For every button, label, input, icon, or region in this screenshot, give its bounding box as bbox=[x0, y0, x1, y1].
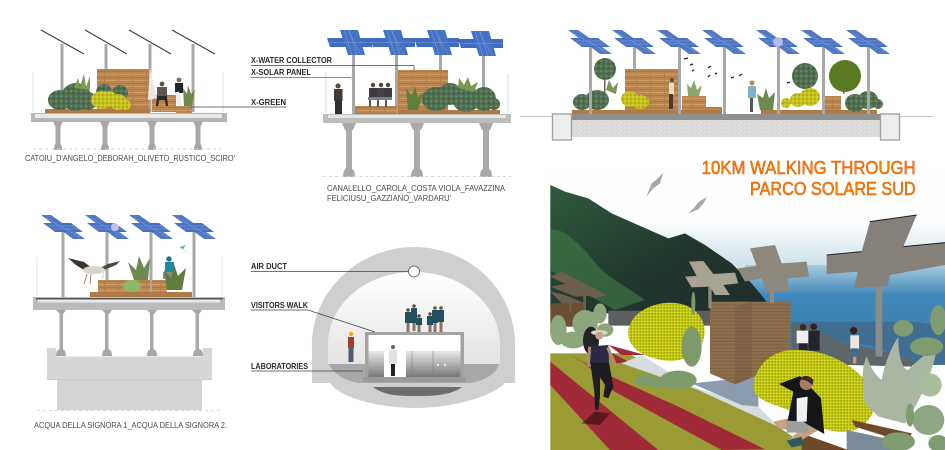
mountain bbox=[550, 185, 767, 317]
abutment bbox=[47, 348, 212, 410]
planter foreground bbox=[802, 420, 912, 450]
laboratory box bbox=[363, 332, 466, 382]
two people on steps bbox=[157, 78, 183, 106]
wooden wall box bbox=[710, 302, 791, 384]
lab technician bbox=[389, 345, 397, 376]
distant solar panels bbox=[550, 272, 607, 312]
callouts: VISITORS WALK bbox=[251, 301, 308, 310]
posts and panels bbox=[568, 30, 890, 114]
caption: ACQUA DELLA SIGNORA 1_ACQUA DELLA SIGNORA 2. bbox=[34, 421, 227, 430]
near ground base bbox=[550, 353, 812, 450]
callouts: X-WATER COLLECTOR bbox=[251, 56, 332, 65]
pedestrian and cyclist bbox=[669, 78, 756, 112]
caption second line: FELICIUSU_GAZZIANO_VARDARU' bbox=[327, 194, 451, 203]
posts and panels bbox=[37, 215, 222, 297]
background wall bbox=[608, 311, 712, 326]
title: 10KM WALKING THROUGH bbox=[702, 157, 916, 178]
callouts bbox=[251, 262, 408, 371]
plants: green and yellow bushes bbox=[48, 68, 195, 111]
photovoltaic posts and edge-on panels bbox=[33, 30, 223, 112]
callouts: LABORATORIES bbox=[251, 362, 309, 371]
birds bbox=[684, 58, 790, 83]
callouts: AIR DUCT bbox=[251, 262, 287, 271]
coastline bbox=[791, 322, 945, 363]
sky bbox=[550, 150, 945, 270]
mountain vegetation highlights bbox=[550, 230, 645, 310]
caption: CATOIU_D'ANGELO_DEBORAH_OLIVETO_RUSTICO_SCIRO' bbox=[25, 154, 235, 163]
visitors on steps and walking man bbox=[334, 83, 392, 114]
wooden planters bbox=[45, 69, 192, 113]
cactus left background bbox=[550, 303, 613, 348]
distant wood box bbox=[550, 303, 584, 327]
section drawing: long walkway with seven panels bbox=[520, 30, 934, 140]
stork bbox=[68, 258, 120, 284]
deck and pillars bbox=[31, 113, 227, 150]
trees and bushes bbox=[573, 58, 883, 112]
section drawing: Acqua della Signora bbox=[33, 215, 227, 430]
green bushes bbox=[406, 77, 500, 112]
grey cross panels and poles bbox=[685, 215, 945, 357]
yellow bush left bbox=[628, 303, 705, 361]
sea bbox=[745, 265, 945, 365]
yellow bush right bbox=[753, 350, 875, 432]
section drawing: Catoiu olive grove bbox=[25, 30, 286, 163]
title bbox=[702, 157, 916, 199]
callouts: X-SOLAR PANEL bbox=[251, 68, 311, 77]
callouts: X-GREEN bbox=[251, 98, 286, 107]
posts and solar panels bbox=[326, 30, 508, 114]
section drawing: Canalello with blue solar panels bbox=[251, 30, 511, 203]
deck with gravel bbox=[552, 114, 900, 140]
wooden planters bbox=[355, 70, 500, 114]
cactus near bush bbox=[635, 292, 702, 389]
group of visitors bbox=[405, 304, 444, 332]
title: PARCO SOLARE SUD bbox=[750, 178, 916, 199]
ground line bbox=[520, 116, 934, 118]
tunnel shell bbox=[312, 247, 515, 408]
plants and visitor bbox=[123, 256, 186, 292]
deck and three pillars bbox=[323, 114, 511, 177]
red stripes bbox=[550, 345, 765, 450]
deck and pillars bbox=[33, 297, 225, 356]
agave and cactus foreground bbox=[863, 305, 945, 450]
viewers at the railing bbox=[797, 323, 859, 363]
man on phone seated bbox=[773, 376, 824, 447]
wooden planters bbox=[572, 69, 877, 114]
caption: CANALELLO_CAROLA_COSTA VIOLA_FAVAZZINA bbox=[327, 184, 506, 193]
air duct bbox=[408, 266, 420, 277]
rendered perspective view bbox=[550, 150, 945, 450]
pale path bbox=[622, 355, 778, 427]
tunnel section bbox=[251, 247, 515, 408]
callouts bbox=[251, 56, 414, 107]
wooden planters bbox=[90, 280, 192, 297]
seagulls bbox=[646, 173, 707, 213]
small blue bird bbox=[175, 242, 189, 254]
hiker bbox=[582, 327, 615, 425]
worker bbox=[348, 332, 354, 362]
